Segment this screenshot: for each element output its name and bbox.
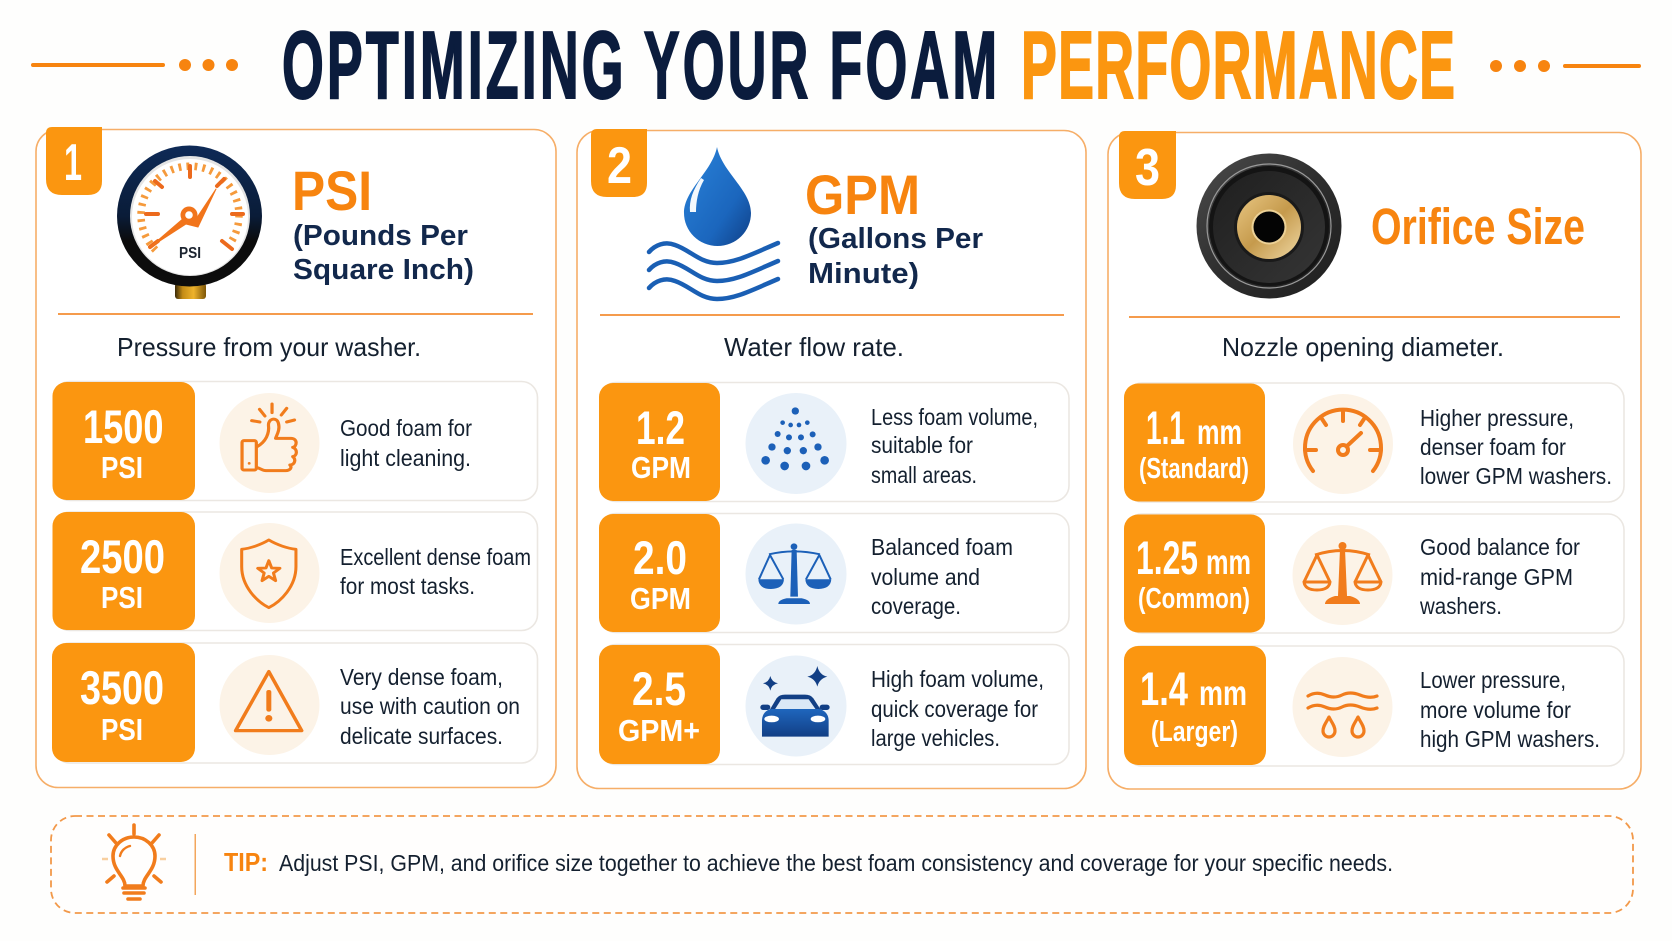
panel: GPM	[577, 129, 1086, 788]
row: 1500 PSI: PSI	[101, 450, 143, 485]
row: 3500 PSI: delicate surfaces.	[340, 723, 503, 749]
row: 1.4 mm: mm	[1199, 674, 1247, 713]
badge: 2: 2	[607, 137, 632, 195]
icon: speedometer dial	[1293, 394, 1393, 494]
title ornament: left	[31, 59, 238, 71]
badge: 1: 1	[64, 134, 82, 192]
callout: tip	[51, 816, 1633, 913]
row: 1.2 GPM	[599, 382, 1069, 502]
row: 1500 PSI: light cleaning.	[340, 445, 471, 471]
row: 2.5 GPM+: large vehicles.	[871, 725, 1000, 751]
tip text: Adjust PSI, GPM, and orifice size together to achieve the best foam consistency and coverage for your specific needs.	[279, 850, 1393, 876]
icon: shield with star	[220, 523, 320, 623]
row: 3500 PSI: PSI	[101, 712, 143, 747]
row: 1500 PSI	[52, 382, 538, 500]
row: 2.0 GPM	[599, 514, 1069, 632]
row: 1.25 mm: mm	[1206, 543, 1251, 582]
heading: Orifice Size: Orifice Size	[1371, 198, 1585, 255]
row: 1.2 GPM: small areas.	[871, 462, 977, 488]
row: 3500 PSI	[52, 643, 538, 763]
panel: Orifice Size	[1108, 131, 1641, 789]
heading: PSI: (Pounds Per	[293, 220, 468, 252]
row: 1.4 mm	[1124, 646, 1624, 766]
row: 1.2 GPM: Less foam volume,	[871, 404, 1038, 430]
icon: thumbs up	[220, 393, 320, 493]
badge: 2	[591, 129, 647, 197]
icon: light bulb	[102, 825, 166, 899]
badge: 1	[46, 127, 102, 195]
row: 2.5 GPM+: quick coverage for	[871, 696, 1038, 722]
row: 1.25 mm	[1124, 514, 1624, 633]
row: 1.4 mm: Lower pressure,	[1420, 667, 1566, 693]
icon: car with sparkles	[746, 656, 846, 756]
row: 2.0 GPM: GPM	[630, 581, 691, 616]
row: 1.2 GPM: suitable for	[871, 432, 973, 458]
description: Pressure from your washer.	[117, 332, 421, 362]
heading: GPM	[805, 163, 983, 290]
row: 1500 PSI: Good foam for	[340, 415, 472, 441]
row: 1.1 mm: denser foam for	[1420, 434, 1566, 460]
row: 3500 PSI: use with caution on	[340, 693, 520, 719]
icon: blue balance scale	[746, 524, 846, 624]
row: 1500 PSI: 1500	[83, 400, 164, 453]
row: 1.25 mm: 1.25	[1136, 531, 1198, 584]
row: 1.1 mm	[1124, 383, 1624, 502]
badge: 3: 3	[1135, 139, 1160, 197]
badge: 3	[1119, 131, 1176, 199]
row: 2500 PSI: PSI	[101, 580, 143, 615]
row: 1.1 mm: 1.1	[1146, 401, 1185, 454]
row: 2.0 GPM: 2.0	[633, 531, 687, 584]
heading: GPM: Minute)	[808, 258, 919, 290]
icon: pressure gauge	[117, 146, 262, 299]
row: 3500 PSI: 3500	[80, 661, 164, 714]
icon: orange balance scale	[1292, 525, 1392, 625]
description: Water flow rate.	[724, 332, 904, 362]
description: Nozzle opening diameter.	[1222, 332, 1504, 362]
row: 1.4 mm: (Larger)	[1151, 716, 1238, 748]
row: 2.0 GPM: Balanced foam	[871, 534, 1013, 560]
icon: spray dots	[746, 393, 846, 494]
icon: nozzle orifice	[1196, 154, 1342, 298]
row: 2.0 GPM: coverage.	[871, 593, 961, 619]
title ornament: right	[1490, 60, 1641, 72]
row: 2.5 GPM+: GPM+	[618, 713, 700, 748]
panel: PSI	[36, 127, 556, 788]
icon: warning triangle	[220, 655, 320, 755]
heading: GPM: GPM	[805, 163, 920, 226]
row: 1.25 mm: (Common)	[1138, 583, 1250, 615]
row: 1.4 mm: 1.4	[1140, 662, 1188, 715]
title: OPTIMIZING YOUR FOAM	[282, 13, 997, 119]
heading: PSI: PSI	[292, 159, 372, 222]
row: 2500 PSI: for most tasks.	[340, 573, 475, 599]
row: 2500 PSI	[52, 512, 538, 630]
heading: PSI	[292, 159, 474, 286]
row: 2.5 GPM+	[599, 644, 1069, 764]
row: 2.0 GPM: volume and	[871, 564, 980, 590]
title: PERFORMANCE	[1021, 13, 1455, 119]
row: 1.1 mm: (Standard)	[1139, 453, 1249, 485]
icon: pressure gauge: PSI	[179, 245, 201, 262]
row: 2500 PSI: Excellent dense foam	[340, 544, 531, 570]
row: 3500 PSI: Very dense foam,	[340, 664, 503, 690]
row: 2500 PSI: 2500	[80, 530, 165, 583]
row: 1.4 mm: more volume for	[1420, 697, 1571, 723]
tip text: TIP:	[224, 847, 268, 877]
heading: GPM: (Gallons Per	[808, 223, 983, 255]
icon: waves and drops	[1292, 657, 1392, 757]
icon: water drop and waves	[649, 147, 778, 299]
title	[282, 13, 1455, 119]
row: 1.25 mm: washers.	[1419, 593, 1502, 619]
row: 2.5 GPM+: High foam volume,	[871, 666, 1044, 692]
row: 1.2 GPM: GPM	[631, 450, 691, 485]
row: 1.1 mm: lower GPM washers.	[1420, 463, 1612, 489]
row: 1.1 mm: Higher pressure,	[1420, 405, 1574, 431]
row: 1.25 mm: mid-range GPM	[1420, 564, 1573, 590]
heading: PSI: Square Inch)	[293, 254, 474, 286]
row: 1.25 mm: Good balance for	[1420, 534, 1580, 560]
row: 1.1 mm: mm	[1197, 413, 1242, 452]
row: 2.5 GPM+: 2.5	[632, 662, 686, 715]
row: 1.4 mm: high GPM washers.	[1420, 726, 1600, 752]
row: 1.2 GPM: 1.2	[636, 401, 685, 454]
